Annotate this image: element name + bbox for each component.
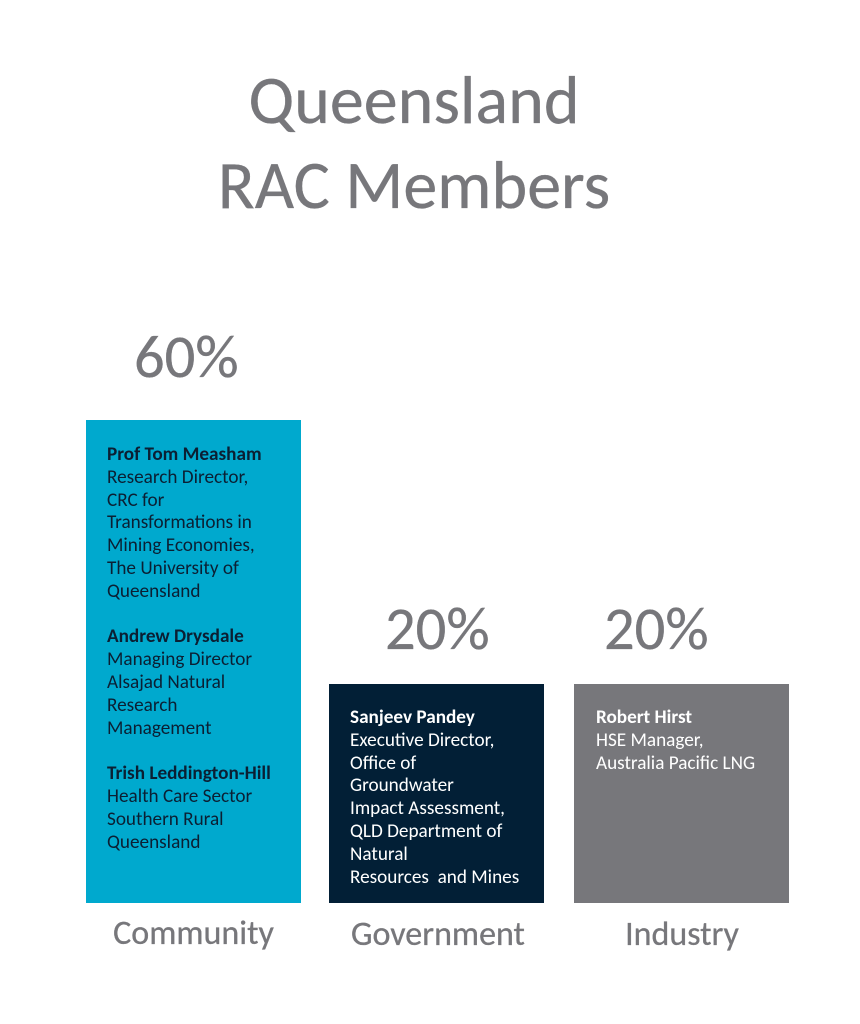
community members text: Prof Tom Measham bbox=[107, 443, 262, 466]
community members text bbox=[107, 443, 271, 854]
title: Queensland bbox=[248, 59, 580, 142]
government member text: Groundwater bbox=[350, 774, 454, 797]
government member text bbox=[350, 706, 519, 889]
community members text: Southern Rural bbox=[107, 808, 224, 831]
government member text: Executive Director, bbox=[350, 729, 494, 752]
government member text: Natural bbox=[350, 843, 408, 866]
community members text: Management bbox=[107, 717, 212, 740]
community members text: CRC for bbox=[107, 489, 164, 512]
title bbox=[218, 59, 610, 227]
industry member text: Robert Hirst bbox=[596, 706, 692, 729]
government member text: Impact Assessment, bbox=[350, 797, 505, 820]
industry member text bbox=[596, 706, 755, 775]
panel: industry bar bbox=[574, 684, 789, 903]
percentage: industry: 20% bbox=[604, 592, 709, 666]
industry member text: HSE Manager, bbox=[596, 729, 704, 752]
label: government: Government bbox=[351, 914, 525, 955]
government member text: Resources and Mines bbox=[350, 866, 519, 889]
government member text: Office of bbox=[350, 752, 416, 775]
percentage: community: 60% bbox=[134, 320, 239, 394]
panel: community bar bbox=[86, 420, 301, 903]
community members text: Trish Leddington-Hill bbox=[107, 762, 271, 785]
community members text: Health Care Sector bbox=[107, 785, 252, 808]
community members text: Research bbox=[107, 694, 177, 717]
community members text: Managing Director bbox=[107, 648, 252, 671]
percentage: government: 20% bbox=[385, 592, 490, 666]
government member text: QLD Department of bbox=[350, 820, 502, 843]
title: RAC Members bbox=[218, 144, 610, 227]
community members text: Transformations in bbox=[107, 511, 252, 534]
community members text: Andrew Drysdale bbox=[107, 625, 244, 648]
government member text: Sanjeev Pandey bbox=[350, 706, 475, 729]
label: community: Community bbox=[113, 913, 274, 954]
community members text: Queensland bbox=[107, 831, 200, 854]
panel: government bar bbox=[329, 684, 544, 903]
industry member text: Australia Pacific LNG bbox=[596, 752, 755, 775]
community members text: Research Director, bbox=[107, 466, 248, 489]
community members text: The University of bbox=[107, 557, 239, 580]
community members text: Alsajad Natural bbox=[107, 671, 225, 694]
community members text: Mining Economies, bbox=[107, 534, 255, 557]
label: industry: Industry bbox=[625, 914, 739, 955]
community members text: Queensland bbox=[107, 580, 200, 603]
